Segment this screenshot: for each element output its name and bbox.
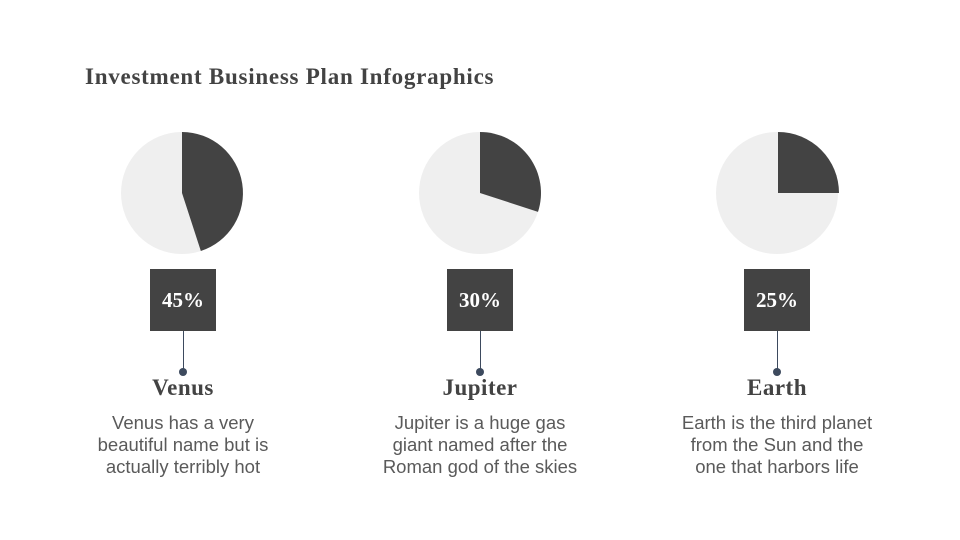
- connector: [480, 331, 481, 372]
- description: [98, 412, 268, 477]
- percent box: [744, 269, 810, 331]
- description: [682, 412, 872, 477]
- pie: jupiter: [419, 132, 541, 254]
- title: Investment Business Plan Infographics: [85, 64, 494, 89]
- percent box: [447, 269, 513, 331]
- percent box: 45%: [162, 288, 204, 312]
- pie: venus: [121, 132, 243, 254]
- description: Venus has a very: [112, 412, 254, 433]
- description: Earth is the third planet: [682, 412, 872, 433]
- connector: [776, 331, 778, 372]
- label: Venus: [152, 375, 214, 400]
- description: [383, 412, 577, 477]
- panel: venus: [98, 269, 268, 477]
- description: actually terribly hot: [106, 456, 260, 477]
- percent box: [150, 269, 216, 331]
- description: Roman god of the skies: [383, 456, 577, 477]
- percent box: 30%: [459, 288, 501, 312]
- percent box: 25%: [756, 288, 798, 312]
- description: giant named after the: [393, 434, 567, 455]
- description: one that harbors life: [695, 456, 859, 477]
- description: from the Sun and the: [691, 434, 863, 455]
- pie: earth: [716, 132, 839, 254]
- label: Jupiter: [442, 375, 518, 400]
- connector: [182, 331, 184, 372]
- description: Jupiter is a huge gas: [395, 412, 565, 433]
- panel: earth: [682, 269, 872, 477]
- label: Earth: [747, 375, 807, 400]
- panel: jupiter: [383, 269, 577, 477]
- description: beautiful name but is: [98, 434, 268, 455]
